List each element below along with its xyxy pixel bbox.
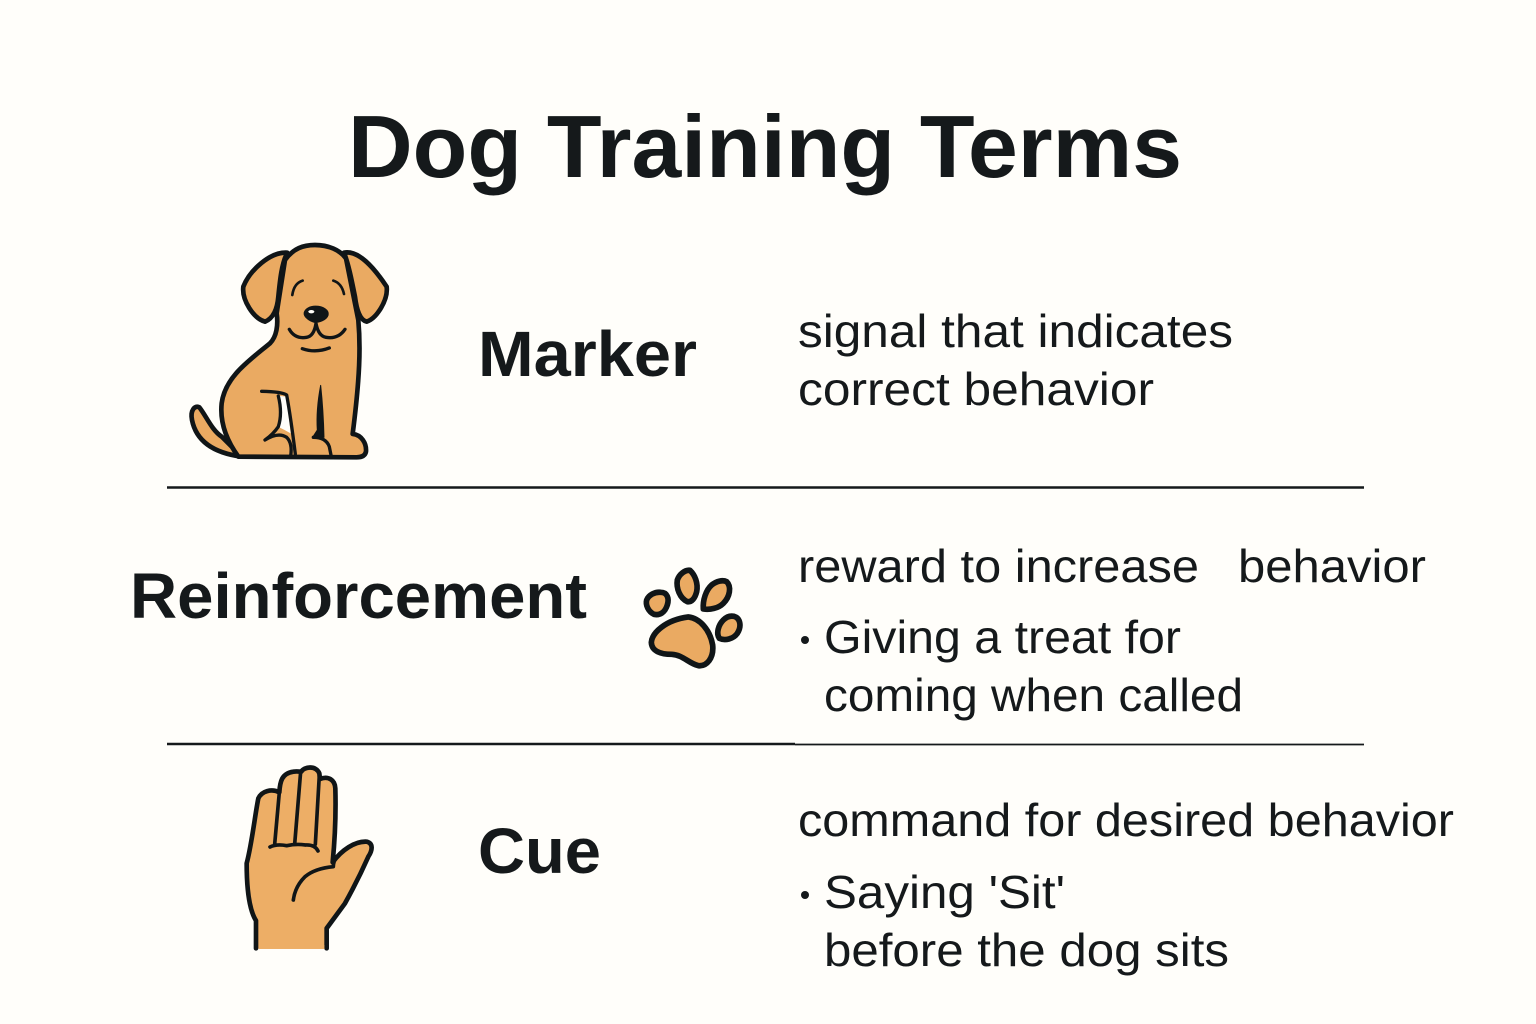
icon: paw print — [646, 570, 740, 666]
definition: Cue — [798, 794, 1454, 976]
term: Reinforcement: Reinforcement — [130, 560, 587, 632]
definition: Marker: signal that indicates — [798, 305, 1233, 357]
row: Reinforcement — [130, 540, 1426, 721]
term: Marker: Marker — [478, 318, 697, 390]
definition: Cue: command for desired behavior — [798, 794, 1454, 846]
icon: sitting dog — [192, 245, 387, 457]
definition: Marker — [798, 305, 1233, 415]
definition: Reinforcement: coming when called — [824, 669, 1243, 721]
row: Cue — [247, 767, 1454, 976]
definition: Reinforcement — [798, 540, 1426, 721]
definition: Cue: Saying 'Sit' — [824, 866, 1065, 918]
term: Cue: Cue — [478, 815, 601, 887]
icon: raised hand — [247, 767, 372, 949]
definition: Reinforcement: reward to increase — [798, 540, 1199, 592]
definition: Cue: before the dog sits — [824, 924, 1229, 976]
definition: Marker: correct behavior — [798, 363, 1154, 415]
definition: Reinforcement: Giving a treat for — [824, 611, 1181, 663]
definition: Reinforcement: behavior — [1238, 540, 1426, 592]
title: Dog Training Terms — [348, 97, 1182, 196]
row: Marker — [192, 245, 1233, 457]
